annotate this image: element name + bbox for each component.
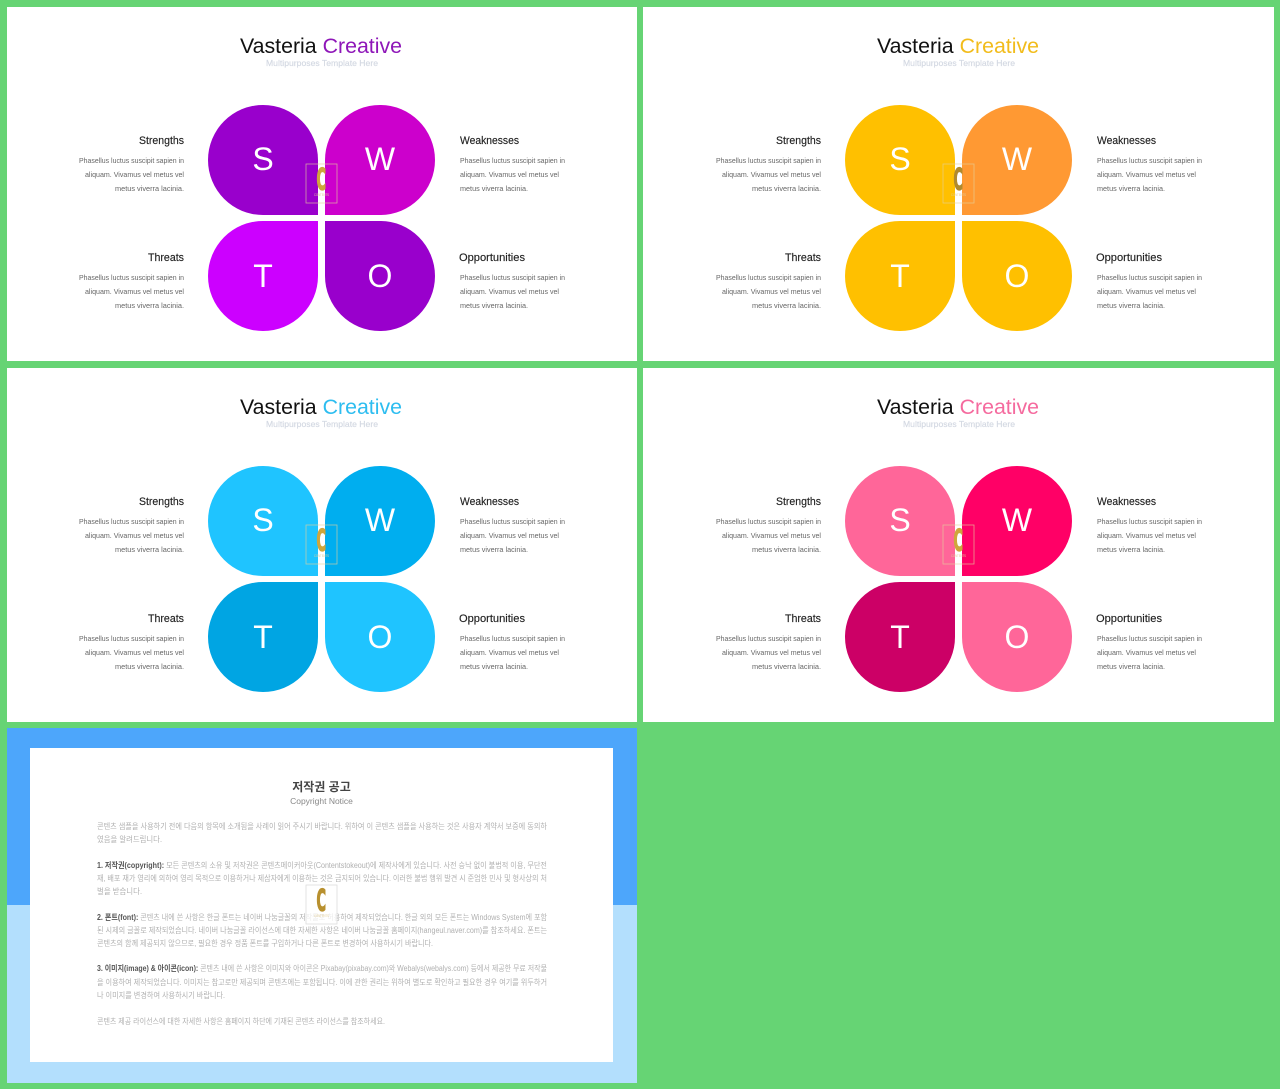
text block: Strengths: metus viverra lacinia. <box>752 184 821 193</box>
petal: O: O <box>1005 619 1029 655</box>
panel: copyright notice <box>7 728 637 1083</box>
text block: Weaknesses: metus viverra lacinia. <box>460 184 528 193</box>
text block: Weaknesses <box>1097 135 1202 193</box>
panel: purple SWOT <box>7 7 637 361</box>
text block: Strengths: aliquam. Vivamus vel metus vel <box>85 531 184 540</box>
text block: Weaknesses: Weaknesses <box>460 496 519 508</box>
text block: Weaknesses: Phasellus luctus suscipit sapien in <box>460 517 565 526</box>
petal: O <box>962 221 1072 331</box>
text block: Opportunities: Phasellus luctus suscipit sapien in <box>1097 273 1202 282</box>
text block: Threats: Phasellus luctus suscipit sapien in <box>79 273 184 282</box>
text block: closing line: 콘텐츠 제공 라이선스에 대한 자세한 사항은 홈페이지 하단에 기재된 콘텐츠 라이선스를 참조하세요. <box>97 1016 385 1026</box>
petal: T <box>845 582 955 692</box>
text block: Threats: metus viverra lacinia. <box>115 301 184 310</box>
text block: Threats <box>716 252 821 310</box>
text block: Strengths: Phasellus luctus suscipit sapien in <box>79 517 184 526</box>
icon: watermark <box>306 884 337 924</box>
text block: Strengths: Phasellus luctus suscipit sapien in <box>716 517 821 526</box>
text block: Opportunities <box>1096 252 1202 310</box>
text block: Weaknesses: aliquam. Vivamus vel metus vel <box>460 170 559 179</box>
text block: Threats: aliquam. Vivamus vel metus vel <box>85 287 184 296</box>
text block: Weaknesses: aliquam. Vivamus vel metus vel <box>460 531 559 540</box>
petal: S: S <box>889 502 911 538</box>
text block: Threats: Phasellus luctus suscipit sapien in <box>716 273 821 282</box>
text block: Strengths <box>716 496 821 554</box>
text block: Threats: Threats <box>148 613 184 625</box>
text block: Threats: Threats <box>785 252 821 264</box>
text block: Threats <box>79 613 184 671</box>
text block: Weaknesses: Weaknesses <box>460 135 519 147</box>
text block: Weaknesses: aliquam. Vivamus vel metus vel <box>1097 531 1196 540</box>
petal: T <box>845 221 955 331</box>
text block: Opportunities: Phasellus luctus suscipit sapien in <box>460 634 565 643</box>
title: Vasteria Creative <box>877 396 1039 419</box>
text block: Weaknesses <box>460 496 565 554</box>
text block: intro: 콘텐츠 샘플을 사용하기 전에 다음의 항목에 소개됨을 사례이 읽어 주시기 바랍니다. 위하여 이 콘텐츠 샘플을 사용하는 것은 사용자 계약서 보증에 동의하 <box>97 821 548 831</box>
petal: W <box>325 466 435 576</box>
text block: Threats: Phasellus luctus suscipit sapien in <box>79 634 184 643</box>
text block: Opportunities: metus viverra lacinia. <box>460 301 528 310</box>
petal: W: W <box>1002 141 1033 177</box>
text block: intro: 였음을 알려드립니다. <box>97 834 162 844</box>
text block: Opportunities: aliquam. Vivamus vel metus vel <box>460 648 559 657</box>
text block: Opportunities: aliquam. Vivamus vel metus vel <box>1097 648 1196 657</box>
text block: Weaknesses: Phasellus luctus suscipit sapien in <box>1097 156 1202 165</box>
text block: Opportunities: Phasellus luctus suscipit sapien in <box>460 273 565 282</box>
text block: section 1: 벌을 받습니다. <box>97 886 142 896</box>
petal: S: S <box>252 502 274 538</box>
petal: O <box>962 582 1072 692</box>
subtitle: Multipurposes Template Here <box>266 419 378 429</box>
text block: Strengths: Strengths <box>776 496 821 508</box>
text block: section 3: 3. 이미지(image) & 아이콘(icon): 콘텐츠 내에 쓴 사항은 이미지와 아이콘은 Pixabay(pixabay.com)와 Webalys(webalys.com) 등에서 제공한 무료 저작물 <box>97 963 547 973</box>
text block: Weaknesses: aliquam. Vivamus vel metus vel <box>1097 170 1196 179</box>
petal: W <box>962 466 1072 576</box>
petal: S <box>208 466 318 576</box>
icon: watermark <box>943 524 974 564</box>
text block: Threats: aliquam. Vivamus vel metus vel <box>85 648 184 657</box>
text block: Opportunities: aliquam. Vivamus vel metus vel <box>1097 287 1196 296</box>
petal: W <box>325 105 435 215</box>
text block: Opportunities: Opportunities <box>1096 252 1162 264</box>
icon: watermark: CONTENTS <box>314 914 329 918</box>
text block: Threats: Threats <box>785 613 821 625</box>
text block: Strengths <box>79 135 184 193</box>
text block: section 1: 1. 저작권(copyright): 모든 콘텐츠의 소유 및 저작권은 콘텐츠메이커아웃(Contentstokeout)에 제작사에게 있습니다. 사전 승낙 없이 불법적 이용, 무단전 <box>97 860 547 870</box>
petal: T: T <box>253 619 273 655</box>
text block: Weaknesses <box>460 135 565 193</box>
petal: O: O <box>368 619 392 655</box>
text block: Weaknesses: Weaknesses <box>1097 496 1156 508</box>
petal: T <box>208 221 318 331</box>
icon: watermark: C <box>316 162 326 196</box>
text block: section 3 <box>97 963 547 1000</box>
text block: Weaknesses: Phasellus luctus suscipit sapien in <box>1097 517 1202 526</box>
icon: watermark: CONTENTS <box>314 193 329 197</box>
text block: section 2: 된 시제의 글꼴로 제작되었습니다. 네이버 나눔글꼴 라이선스에 대한 자세한 사항은 네이버 나눔글꼴 홈페이지(hangeul.naver.com)를 참조하세요. 폰트는 <box>97 925 547 935</box>
text block: Threats: metus viverra lacinia. <box>752 662 821 671</box>
text block: section 2: 콘텐츠의 함께 제공되지 않으므로, 필요한 경우 정품 폰트를 구입하거나 다른 폰트로 변경하여 사용하시기 바랍니다. <box>97 938 433 948</box>
text block: Opportunities: metus viverra lacinia. <box>460 662 528 671</box>
panel: yellow SWOT <box>643 7 1274 361</box>
petal: S <box>845 466 955 576</box>
subtitle: Multipurposes Template Here <box>266 58 378 68</box>
petal: W: W <box>365 141 396 177</box>
text block: section 2: 2. 폰트(font): 콘텐츠 내에 쓴 사항은 한글 폰트는 네이버 나눔글꼴의 저작물로 허용하여 제작되었습니다. 한글 외의 모든 폰트는 Windows System에 포함 <box>97 912 548 922</box>
icon: watermark: C <box>954 524 963 558</box>
panel: blue SWOT <box>7 368 637 722</box>
icon: watermark: CONTENTS <box>951 554 966 558</box>
text block: Opportunities: metus viverra lacinia. <box>1097 301 1165 310</box>
text block: intro <box>97 821 548 844</box>
petal: W <box>962 105 1072 215</box>
title: Vasteria Creative <box>877 35 1039 58</box>
text block: Threats: Threats <box>148 252 184 264</box>
text block: Threats: aliquam. Vivamus vel metus vel <box>722 648 821 657</box>
text block: Strengths: Phasellus luctus suscipit sapien in <box>79 156 184 165</box>
petal: O: O <box>368 258 392 294</box>
panel: pink SWOT <box>643 368 1274 722</box>
text block: Opportunities: Opportunities <box>459 252 525 264</box>
text block: Strengths: Strengths <box>139 496 184 508</box>
text block: Opportunities: Opportunities <box>1096 613 1162 625</box>
text block: section 1 <box>97 860 547 896</box>
text block: Strengths: metus viverra lacinia. <box>115 545 184 554</box>
text block: Opportunities: Opportunities <box>459 613 525 625</box>
text block: Threats: Phasellus luctus suscipit sapien in <box>716 634 821 643</box>
text block: Strengths: metus viverra lacinia. <box>752 545 821 554</box>
petal: T <box>208 582 318 692</box>
text block: Threats: aliquam. Vivamus vel metus vel <box>722 287 821 296</box>
icon: watermark <box>943 162 974 203</box>
icon: watermark: CONTENTS <box>951 193 966 197</box>
text block: section 3: 을 이용하여 제작되었습니다. 이미지는 참고로만 제공되며 콘텐츠에는 포함됩니다. 이에 관한 권리는 위하여 별도로 확인하고 필요한 경우 여기를 위두하거 <box>97 977 547 987</box>
title: Vasteria Creative <box>240 396 402 419</box>
text block: Threats <box>716 613 821 671</box>
petal: T: T <box>890 258 910 294</box>
petal: T: T <box>253 258 273 294</box>
icon: watermark: C <box>316 884 326 918</box>
text block: Opportunities <box>459 613 565 671</box>
text block: Opportunities <box>1096 613 1202 671</box>
text block: Threats: metus viverra lacinia. <box>752 301 821 310</box>
text block: Strengths: Strengths <box>776 135 821 147</box>
text block: Opportunities: metus viverra lacinia. <box>1097 662 1165 671</box>
title: Vasteria Creative <box>240 35 402 58</box>
petal: S: S <box>252 141 274 177</box>
petal: T: T <box>890 619 910 655</box>
text block: Strengths: aliquam. Vivamus vel metus vel <box>722 170 821 179</box>
text block: Strengths: Strengths <box>139 135 184 147</box>
text block: Weaknesses: metus viverra lacinia. <box>460 545 528 554</box>
subheading: Copyright Notice <box>290 796 353 806</box>
subtitle: Multipurposes Template Here <box>903 419 1015 429</box>
text block: Threats <box>79 252 184 310</box>
petal: W: W <box>1002 502 1033 538</box>
text block: section 2 <box>97 912 548 948</box>
petal: O <box>325 221 435 331</box>
petal: O: O <box>1005 258 1029 294</box>
petal: S <box>845 105 955 215</box>
text block: Strengths <box>79 496 184 554</box>
petal: S: S <box>889 141 911 177</box>
icon: watermark <box>306 524 337 564</box>
icon: watermark: C <box>316 524 326 558</box>
text block: Weaknesses: Weaknesses <box>1097 135 1156 147</box>
petal: S <box>208 105 318 215</box>
text block: Weaknesses <box>1097 496 1202 554</box>
text block: section 3: 나 이미지를 변경하여 사용하시기 바랍니다. <box>97 990 225 1000</box>
text block: Opportunities: Phasellus luctus suscipit sapien in <box>1097 634 1202 643</box>
text block: Weaknesses: Phasellus luctus suscipit sapien in <box>460 156 565 165</box>
subtitle: Multipurposes Template Here <box>903 58 1015 68</box>
text block: Strengths: metus viverra lacinia. <box>115 184 184 193</box>
text block: Strengths: aliquam. Vivamus vel metus vel <box>722 531 821 540</box>
heading: copyright notice: 저작권 공고 <box>292 779 351 794</box>
icon: watermark <box>306 162 337 203</box>
text block: Strengths: Phasellus luctus suscipit sapien in <box>716 156 821 165</box>
text block: Opportunities <box>459 252 565 310</box>
petal: O <box>325 582 435 692</box>
text block: Weaknesses: metus viverra lacinia. <box>1097 545 1165 554</box>
icon: watermark: C <box>954 162 963 196</box>
text block: Threats: metus viverra lacinia. <box>115 662 184 671</box>
text block: Weaknesses: metus viverra lacinia. <box>1097 184 1165 193</box>
petal: W: W <box>365 502 396 538</box>
icon: watermark: CONTENTS <box>314 554 329 558</box>
text block: Strengths: aliquam. Vivamus vel metus vel <box>85 170 184 179</box>
text block: Strengths <box>716 135 821 193</box>
text block: section 1: 재, 배포 재가 영리에 의하여 영리 목적으로 이용하거나 제삼자에게 이용하는 것은 금지되어 있습니다. 이러한 불법 행위 발견 시 준엄한 민사 및 형사상의 처 <box>97 873 547 883</box>
text block: Opportunities: aliquam. Vivamus vel metus vel <box>460 287 559 296</box>
